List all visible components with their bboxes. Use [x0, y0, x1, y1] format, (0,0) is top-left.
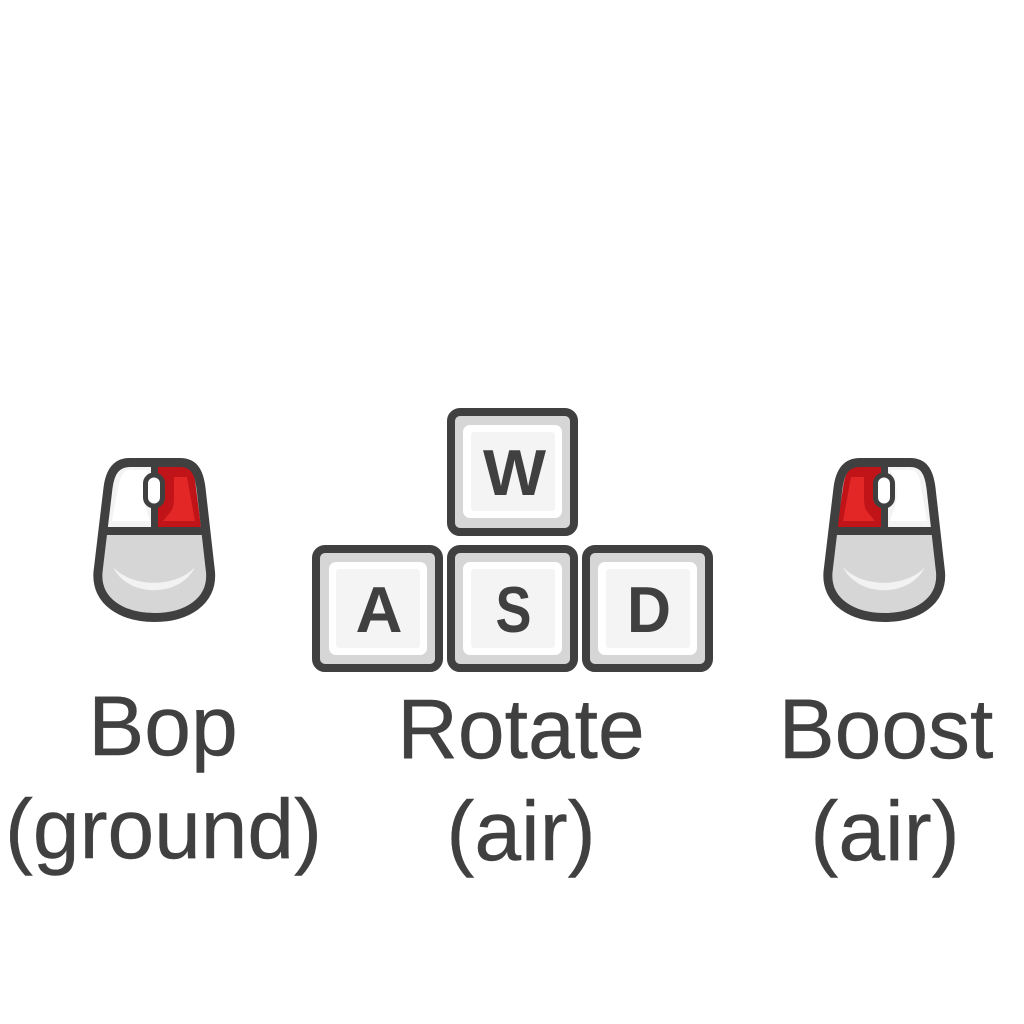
- icon: D key: [586, 549, 709, 668]
- icon: W key: [451, 412, 574, 532]
- icon: mouse with left button highlighted: [828, 462, 941, 618]
- icon: mouse with right button highlighted: [98, 462, 211, 618]
- icon: S key: [451, 549, 574, 668]
- label: Boost (air): [779, 682, 993, 878]
- label: Boost (air): Boost: [779, 682, 993, 776]
- label: Bop (ground): (ground): [5, 782, 322, 876]
- label: Rotate (air): Rotate: [397, 682, 645, 776]
- label: Boost (air): (air): [810, 784, 960, 878]
- icon: A key: A: [356, 573, 402, 646]
- icon: A key: [316, 549, 439, 668]
- label: Rotate (air): [397, 682, 645, 878]
- label: Bop (ground): [5, 679, 322, 876]
- icon: S key: S: [496, 573, 532, 646]
- icon: W key: W: [483, 436, 547, 509]
- icon: D key: D: [627, 573, 671, 646]
- label: Bop (ground): Bop: [88, 679, 238, 773]
- label: Rotate (air): (air): [446, 784, 596, 878]
